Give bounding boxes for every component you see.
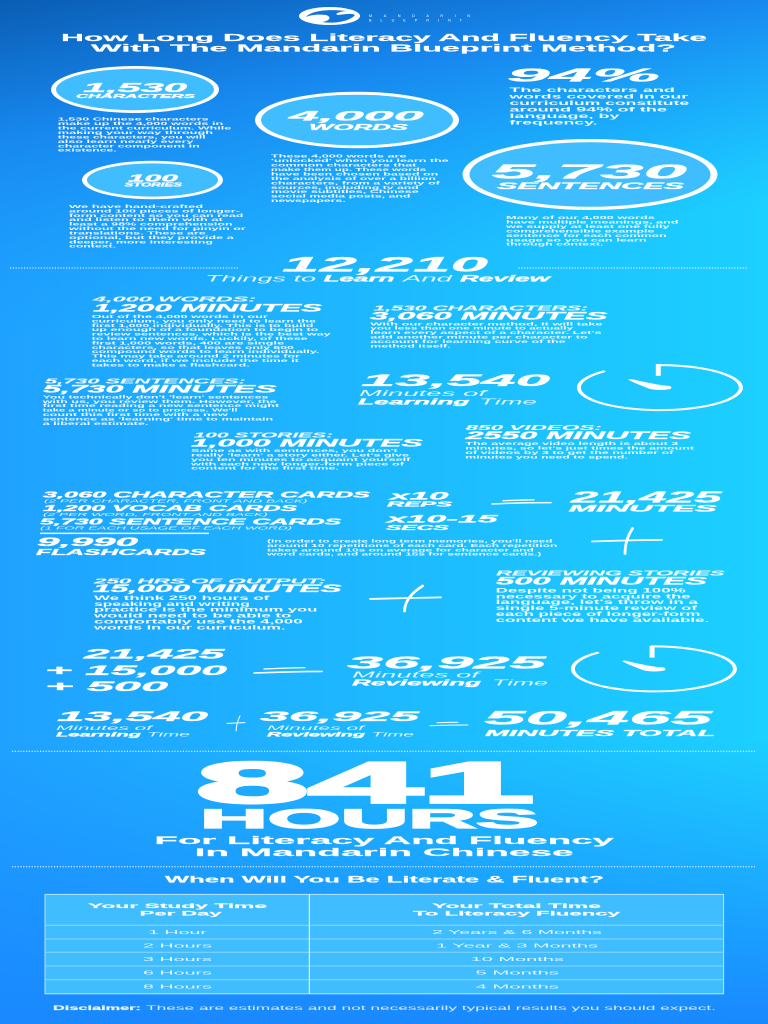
sum: reviewing minutes bbox=[45, 646, 228, 695]
panel: 250 hrs of output: speaking and writing bbox=[94, 601, 250, 608]
text block: words description: social media posts, and bbox=[271, 194, 411, 199]
panel: flashcard list: FLASHCARDS bbox=[36, 547, 207, 557]
panel: 850 videos 2550 minutes: The average video length is about 3 bbox=[465, 441, 679, 446]
disclaimer bbox=[53, 1006, 717, 1012]
table heading: When Will You Be Literate & Fluent? bbox=[165, 875, 604, 885]
logo: Mandarin Blueprint: MANDARIN bbox=[369, 14, 470, 18]
panel: reviewing stories: necessary to acquire the bbox=[496, 593, 692, 600]
heading: 12,210 things to learn and review bbox=[205, 254, 553, 284]
text block: 94% description: words covered in our bbox=[507, 94, 690, 101]
total: 36,925 reviewing: Time bbox=[372, 732, 415, 739]
text block: stories description: deeper, more interesting bbox=[69, 239, 213, 244]
table body rows: 6 Hours bbox=[143, 971, 212, 977]
table header row: Per Day bbox=[140, 910, 223, 917]
stat: 21,425 minutes bbox=[568, 490, 723, 514]
panel: 4,000 words 1,200 minutes: 1,200 MINUTES bbox=[93, 303, 324, 315]
text block: 94% description: around 94% of the bbox=[509, 107, 668, 114]
panel: 100 stories 1,000 minutes: 100 STORIES: bbox=[194, 431, 335, 440]
table body rows: 5 Months bbox=[476, 971, 559, 977]
table header row: To Literacy Fluency bbox=[413, 910, 621, 917]
total: 36,925 reviewing: 36,925 bbox=[260, 708, 420, 724]
text block: stories description: form content so you can read bbox=[69, 213, 244, 218]
icon: equals sign bbox=[492, 500, 551, 504]
table body rows: 1 Year & 3 Months bbox=[436, 944, 598, 950]
text block: words description: have been chosen based on bbox=[271, 171, 439, 176]
panel: 5,730 sentences 5,730 minutes: take a minute or so to process. We'll bbox=[43, 408, 237, 413]
total: 13,540 learning: Minutes of bbox=[56, 725, 156, 732]
panel: 5,730 sentences 5,730 minutes: count this first time with a new bbox=[43, 412, 229, 417]
headline: 841 hours: 841 bbox=[196, 751, 534, 816]
panel: reviewing stories: single 5-minute review of bbox=[496, 605, 699, 612]
text block: characters description: make up the 4,000 words in bbox=[58, 121, 224, 126]
panel: 1,530 characters 3,060 minutes: learn every aspect of a character. Let's bbox=[370, 330, 603, 335]
panel: 5,730 sentences badge: SENTENCES bbox=[497, 181, 684, 191]
text block: words description: make them up. These words bbox=[271, 167, 427, 172]
text block: sentences description: we supply at least one fully bbox=[503, 224, 671, 229]
panel: 1,530 characters badge: 1,530 bbox=[83, 80, 187, 95]
text block: sentences description: comprehensible example bbox=[506, 228, 655, 233]
subheading: for literacy and fluency: In Mandarin Chinese bbox=[195, 847, 574, 859]
table body rows: 10 Months bbox=[471, 957, 564, 963]
panel: 4,000 words 1,200 minutes: first 1,000 individually. This is to build bbox=[92, 323, 314, 328]
text block: stories description bbox=[66, 204, 246, 249]
panel: 250 hrs of output: 250 HRS OF OUTPUT: bbox=[91, 576, 328, 585]
title: How Long Does Literacy And Fluency Take bbox=[61, 33, 708, 44]
total: 36,925 reviewing: Minutes of bbox=[267, 725, 368, 732]
text block: words description: common characters that bbox=[271, 163, 418, 168]
text block: words description: movie subtitles, Chinese bbox=[271, 189, 420, 194]
text block: repetition note: takes around 10s on average for character and bbox=[267, 547, 534, 552]
panel: 850 videos 2550 minutes: 850 VIDEOS: bbox=[466, 423, 604, 432]
panel: 4,000 words 1,200 minutes: takes to make a flashcard. bbox=[92, 362, 250, 367]
table body rows: 2 Years & 6 Months bbox=[432, 930, 602, 936]
table header row: Your Study Time bbox=[88, 903, 268, 910]
panel: 850 videos 2550 minutes: of videos by 3 to get the number of bbox=[465, 450, 675, 455]
panel: flashcard list: (2 PER CHARACTER, FRONT AND BACK) bbox=[44, 499, 309, 504]
total: 36,925 reviewing bbox=[260, 708, 420, 739]
panel: 4,000 words 1,200 minutes: characters, so that leaves only 600 bbox=[92, 345, 295, 350]
text block: words description: the analysis of over a billion bbox=[271, 176, 436, 181]
panel: flashcard list: (1 FOR EACH USAGE OF EACH WORD) bbox=[40, 525, 294, 530]
text block: repetition note: word cards, and around 15s for sentence cards.) bbox=[264, 552, 542, 557]
panel: 4,000 words 1,200 minutes: curriculum, you only need to learn the bbox=[92, 318, 317, 323]
panel: reviewing stories: content we have available. bbox=[496, 617, 710, 624]
panel: 5,730 sentences 5,730 minutes: You technically don't 'learn' sentences bbox=[43, 394, 269, 399]
panel: 850 videos 2550 minutes: 2550 MINUTES bbox=[463, 430, 693, 442]
panel: 250 hrs of output: 15,000 MINUTES bbox=[93, 583, 344, 595]
panel: flashcard list: 1,200 VOCAB CARDS bbox=[43, 504, 300, 513]
panel: 4,000 words badge: 4,000 bbox=[285, 109, 426, 124]
panel: 4,000 words 1,200 minutes: compound words to learn individually. bbox=[92, 349, 319, 354]
panel: 1,530 characters 3,060 minutes bbox=[370, 304, 610, 348]
panel: 4,000 words 1,200 minutes: 4,000 WORDS: bbox=[90, 295, 258, 304]
total: 50,465 minutes: 50,465 bbox=[484, 708, 714, 729]
table body rows: 3 Hours bbox=[143, 957, 212, 963]
text block: stories description: We have hand-crafted bbox=[69, 204, 204, 209]
text block: repetition note: (In order to create long term memories, you'll need bbox=[267, 539, 553, 544]
icon: stopwatch learning bbox=[579, 364, 741, 410]
table header row bbox=[88, 903, 621, 917]
total: 50,465 minutes: MINUTES TOTAL bbox=[485, 728, 715, 738]
stat: 94%: 94% bbox=[507, 65, 662, 86]
panel: flashcard list: 3,060 CHARACTER CARDS bbox=[43, 491, 373, 500]
text block: stories description: around 100 pieces of longer- bbox=[69, 208, 241, 213]
sum: reviewing minutes: + 500 bbox=[45, 679, 168, 695]
panel: 4,000 words 1,200 minutes: review sentences, which is the best way bbox=[92, 332, 332, 337]
text block: 94% description: curriculum constitute bbox=[509, 100, 690, 107]
headline: 841 hours: HOURS bbox=[200, 804, 538, 834]
panel: 1,530 characters 3,060 minutes: 1,530 CHARACTERS: bbox=[374, 304, 590, 313]
disclaimer: Disclaimer: bbox=[53, 1006, 141, 1012]
panel: reviewing stories: Despite not being 100% bbox=[496, 587, 687, 594]
subheading: for literacy and fluency: For Literacy And Fluency bbox=[154, 835, 617, 847]
stat: 36,925 minutes of reviewing time: Time bbox=[492, 678, 549, 688]
text block: characters description: these characters, you will bbox=[58, 134, 206, 139]
panel: 850 videos 2550 minutes: minutes, so let's just times the amount bbox=[465, 446, 695, 450]
panel: 4,000 words 1,200 minutes: This may take around 2 minutes for bbox=[92, 354, 300, 359]
text block: characters description: also learn nearly every bbox=[58, 139, 195, 144]
panel: reviewing stories: each piece of longer-form bbox=[496, 611, 701, 618]
panel: 4,000 words 1,200 minutes: first 1,000 words, 400 are single bbox=[92, 340, 285, 345]
panel: flashcard list: 9,990 bbox=[37, 537, 140, 549]
text block: sentences description: Many of our 4,000 words bbox=[506, 215, 656, 220]
text block: stories description: optional, but they provide a bbox=[69, 235, 235, 240]
text block: 94% description bbox=[507, 87, 690, 126]
panel: flashcard list bbox=[36, 491, 373, 557]
stat: 36,925 minutes of reviewing time: 36,925 bbox=[347, 652, 547, 672]
stat: 36,925 minutes of reviewing time: Minutes of bbox=[352, 669, 484, 679]
panel: 250 hrs of output: words in our curriculum. bbox=[91, 624, 286, 631]
heading: 12,210 things to learn and review: Things to bbox=[205, 274, 316, 284]
panel: 5,730 sentences badge: 5,730 bbox=[492, 161, 687, 183]
total: 13,540 learning: Learning bbox=[56, 732, 141, 739]
total: 36,925 reviewing: Reviewing bbox=[267, 732, 365, 739]
disclaimer: These are estimates and not necessarily typical results you should expect. bbox=[146, 1006, 717, 1012]
panel: 1,530 characters 3,060 minutes: you less than one minute to actually bbox=[370, 326, 574, 331]
heading: 12,210 things to learn and review: Review bbox=[460, 274, 553, 284]
panel: 1,530 characters 3,060 minutes: account for learning curve of the bbox=[370, 339, 567, 344]
panel: 250 hrs of output bbox=[91, 576, 344, 631]
table body rows: 1 Hour bbox=[148, 930, 207, 936]
stat: 36,925 minutes of reviewing time bbox=[347, 652, 549, 688]
panel: reviewing stories bbox=[496, 568, 725, 624]
panel: 5,730 sentences 5,730 minutes: a liberal estimate. bbox=[43, 421, 148, 426]
table: study time to fluency bbox=[45, 894, 724, 994]
table body rows bbox=[143, 930, 602, 990]
panel: 1,530 characters 3,060 minutes: 3,060 MINUTES bbox=[370, 310, 610, 322]
panel: 4,000 words badge bbox=[255, 92, 459, 148]
panel: 1,530 characters 3,060 minutes: With our character method, it will take bbox=[370, 321, 604, 326]
panel: 5,730 sentences 5,730 minutes bbox=[40, 376, 280, 426]
panel: 4,000 words 1,200 minutes: up enough of a foundation to begin to bbox=[92, 327, 319, 332]
text block: sentences description: have multiple meanings, and bbox=[506, 219, 679, 224]
heading: 12,210 things to learn and review: 12,210 bbox=[282, 254, 489, 277]
text block: words description bbox=[271, 154, 450, 203]
panel: reviewing stories: language, let's throw in a bbox=[496, 599, 699, 606]
panel: 4,000 words badge: WORDS bbox=[309, 122, 409, 132]
table header row: Your Total Time bbox=[432, 903, 602, 910]
panel: 4,000 words 1,200 minutes bbox=[90, 295, 332, 367]
panel: 100 stories 1,000 minutes: with each new longer-form piece of bbox=[188, 461, 405, 466]
heading: 12,210 things to learn and review: Learn bbox=[324, 274, 396, 284]
panel: 100 stories 1,000 minutes: 1,000 MINUTES bbox=[191, 438, 425, 450]
text block: characters description: existence. bbox=[58, 148, 117, 153]
text block: words description: sources, including tv and bbox=[271, 185, 419, 190]
panel: 1,530 characters 3,060 minutes: add another minute per character to bbox=[370, 335, 588, 340]
text block: repetition note: around 10 repetitions of each card. Each repetition bbox=[267, 543, 558, 548]
heading: 12,210 things to learn and review: And bbox=[400, 274, 455, 284]
table body rows: 2 Hours bbox=[143, 944, 212, 950]
text block: sentences description: usage so you can learn bbox=[506, 237, 647, 242]
table body rows: 4 Months bbox=[476, 984, 559, 990]
panel: 250 hrs of output: comfortably use the 4,000 bbox=[94, 619, 304, 626]
panel: 100 stories 1,000 minutes: Same as with sentences, you don't bbox=[191, 448, 399, 453]
panel: 5,730 sentences 5,730 minutes: with us, you review them. However, the bbox=[40, 399, 278, 404]
text block: words description: characters, from a variety of bbox=[271, 180, 441, 185]
text block: words description: These 4,000 words are bbox=[271, 154, 408, 159]
stat: 13,540 minutes of learning time bbox=[358, 371, 552, 406]
title: With The Mandarin Blueprint Method? bbox=[91, 43, 676, 54]
text block: characters description: making your way through bbox=[58, 130, 213, 135]
icon: equals sign bbox=[254, 668, 322, 673]
subheading: for literacy and fluency bbox=[154, 835, 617, 859]
stat: 21,425 minutes: 21,425 bbox=[568, 490, 723, 507]
text block: stories description: and listen to them with at bbox=[69, 217, 224, 222]
panel: 100 stories 1,000 minutes bbox=[188, 431, 425, 471]
panel: 5,730 sentences 5,730 minutes: first time reading a new sentence might bbox=[43, 403, 280, 408]
panel: 250 hrs of output: We think 250 hours of bbox=[94, 595, 272, 602]
sum: reviewing minutes: 21,425 bbox=[81, 646, 228, 662]
text block: characters description: the current curriculum. While bbox=[58, 125, 232, 130]
panel: 4,000 words 1,200 minutes: to learn new words. Luckily, of these bbox=[92, 336, 309, 341]
multipliers: reps and seconds: x10 bbox=[387, 490, 451, 502]
stat: 13,540 minutes of learning time: Minutes of bbox=[359, 388, 491, 398]
panel: 850 videos 2550 minutes: minutes you need to spend. bbox=[465, 454, 628, 459]
total: 13,540 learning: 13,540 bbox=[57, 708, 209, 724]
text block: words description: 'unlocked' when you learn the bbox=[271, 158, 450, 163]
text block: sentences description bbox=[503, 215, 679, 247]
panel: 5,730 sentences 5,730 minutes: 5,730 MINUTES bbox=[43, 383, 279, 395]
total: 13,540 learning bbox=[56, 708, 209, 739]
sum: reviewing minutes: + 15,000 bbox=[45, 663, 227, 679]
multipliers: reps and seconds: x10-15 bbox=[384, 513, 500, 525]
icon: plus sign bbox=[592, 528, 662, 554]
panel: 250 hrs of output: practice is the minimum you bbox=[94, 607, 318, 614]
panel: 5,730 sentences badge bbox=[462, 139, 718, 210]
panel: 1,530 characters badge: CHARACTERS bbox=[76, 94, 195, 100]
panel: 100 stories 1,000 minutes: you ten minutes to acquaint yourself bbox=[191, 457, 412, 462]
stat: 13,540 minutes of learning time: Learning bbox=[358, 396, 472, 406]
panel: reviewing stories: REVIEWING STORIES bbox=[496, 568, 725, 577]
panel: 5,730 sentences 5,730 minutes: 5,730 SENTENCES: bbox=[45, 376, 248, 385]
panel: 1,530 characters 3,060 minutes: method itself. bbox=[370, 343, 451, 348]
text block: sentences description: sentence for each common bbox=[506, 233, 667, 238]
panel: 5,730 sentences 5,730 minutes: sentence as 'learning' time to maintain bbox=[43, 417, 274, 422]
panel: 4,000 words 1,200 minutes: each word, if we include the time it bbox=[92, 358, 300, 363]
logo: Mandarin Blueprint: BLUEPRINT bbox=[369, 18, 463, 22]
panel: 100 stories badge bbox=[82, 161, 223, 199]
icon: small equals bbox=[430, 722, 468, 726]
panel: 100 stories 1,000 minutes: content for the first time. bbox=[191, 466, 339, 471]
panel: flashcard list: (2 PER WORD, FRONT AND BACK) bbox=[43, 512, 269, 517]
text block: words description: newspapers. bbox=[271, 198, 346, 203]
stat: 21,425 minutes: MINUTES bbox=[569, 504, 717, 514]
panel: 250 hrs of output: would need to be able to bbox=[91, 613, 292, 620]
icon: plus sign bbox=[370, 586, 441, 611]
text block: stories description: translations. These are bbox=[69, 230, 207, 236]
total: 13,540 learning: Time bbox=[147, 732, 191, 739]
text block: stories description: context. bbox=[69, 244, 116, 249]
panel: 850 videos 2550 minutes bbox=[463, 423, 695, 459]
icon: stopwatch reviewing bbox=[573, 646, 735, 691]
panel: 1,530 characters badge bbox=[51, 66, 219, 113]
multipliers: reps and seconds: SECS bbox=[386, 525, 450, 532]
text block: sentences description: through context. bbox=[506, 242, 604, 247]
text block: stories description: without the need for pinyin or bbox=[66, 226, 246, 231]
stat: 36,925 minutes of reviewing time: Reviewing bbox=[352, 678, 481, 688]
panel: flashcard list: 5,730 SENTENCE CARDS bbox=[40, 517, 344, 526]
text block: repetition note bbox=[264, 539, 558, 557]
headline: 841 hours bbox=[196, 751, 538, 834]
text block: characters description: 1,530 Chinese characters bbox=[58, 116, 210, 121]
multipliers: reps and seconds bbox=[384, 490, 500, 532]
panel: 4,000 words 1,200 minutes: Out of the 4,000 words in our bbox=[92, 314, 268, 319]
text block: stories description: least a 98% comprehension bbox=[69, 222, 233, 227]
text block: characters description bbox=[58, 116, 232, 153]
panel: 100 stories badge: 100 bbox=[128, 174, 179, 185]
title bbox=[61, 33, 708, 54]
total: 50,465 minutes bbox=[484, 708, 715, 738]
text block: characters description: character component in bbox=[58, 143, 200, 148]
text block: 94% description: The characters and bbox=[509, 87, 675, 94]
icon: small plus bbox=[227, 716, 245, 731]
stat: 13,540 minutes of learning time: Time bbox=[479, 396, 538, 406]
multipliers: reps and seconds: REPS bbox=[387, 502, 453, 509]
stat: 13,540 minutes of learning time: 13,540 bbox=[361, 371, 552, 390]
text block: 94% description: language, by bbox=[509, 113, 621, 120]
panel: 100 stories 1,000 minutes: really 'learn' a story either. Let's give bbox=[191, 452, 410, 458]
panel: reviewing stories: 500 MINUTES bbox=[496, 575, 709, 587]
table body rows: 8 Hours bbox=[143, 984, 212, 990]
panel: 100 stories badge: STORIES bbox=[124, 182, 184, 188]
text block: 94% description: frequency. bbox=[509, 119, 598, 126]
logo: Mandarin Blueprint bbox=[299, 7, 470, 25]
